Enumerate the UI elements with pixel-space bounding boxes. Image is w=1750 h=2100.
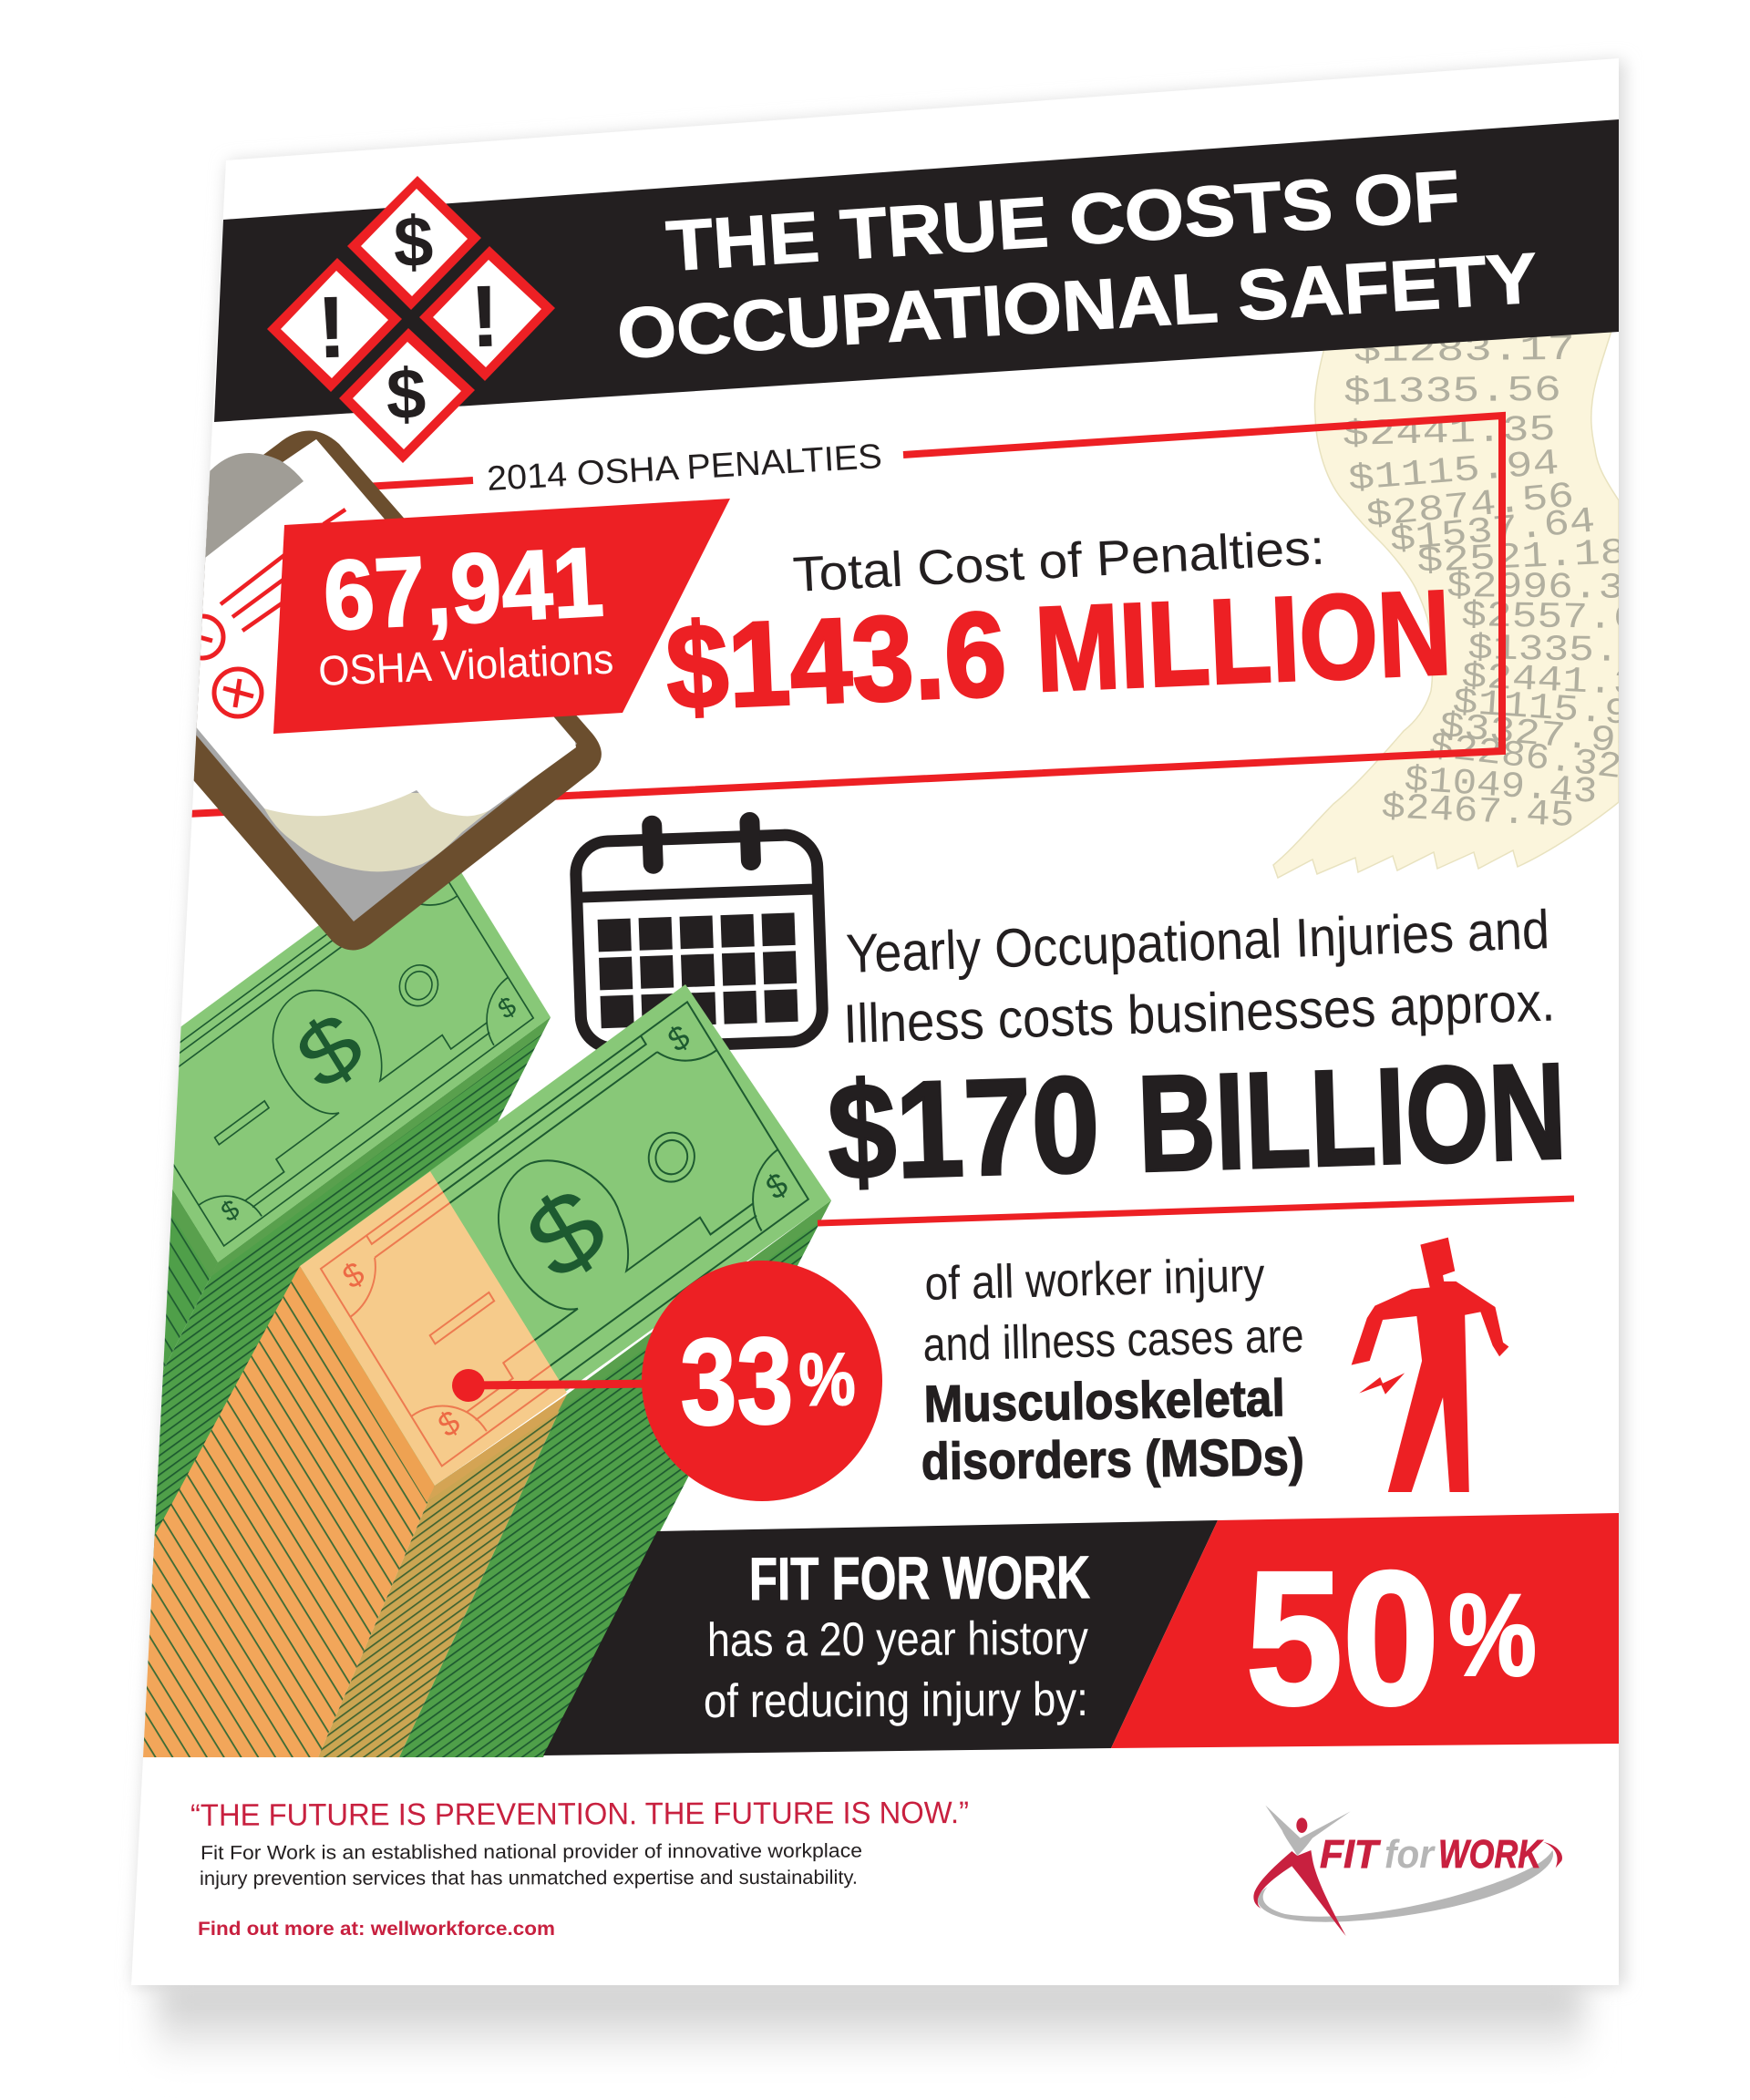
diamond: left exclamation xyxy=(267,258,402,392)
MSD callout: pointer and circle: 33 xyxy=(679,1312,794,1451)
clipboard xyxy=(193,430,602,950)
red rule xyxy=(818,1199,1574,1223)
diamond: bottom dollar: $ xyxy=(386,354,427,434)
plus mark xyxy=(214,669,262,716)
red penalties frame xyxy=(187,416,1502,814)
receipt with printed amounts: $1283.17 xyxy=(1354,330,1575,373)
red violations box xyxy=(273,499,730,734)
back money stack: $ xyxy=(280,992,379,1109)
orange highlighted third of bill: $ xyxy=(432,1402,466,1445)
curled beige sheet xyxy=(264,793,489,871)
yearly cost figure: BILLION xyxy=(1136,1034,1569,1200)
receipt with printed amounts: $1335.56 xyxy=(1343,371,1561,414)
total cost label: Total Cost of Penalties: xyxy=(791,520,1326,602)
footer description xyxy=(200,1839,862,1889)
black history panel: of reducing injury by: xyxy=(704,1673,1088,1728)
title xyxy=(615,155,1539,374)
MSD text: Musculoskeletal xyxy=(923,1369,1285,1434)
back money stack xyxy=(151,873,551,1599)
front money stack: $ xyxy=(507,1162,624,1304)
white sheet xyxy=(197,439,576,817)
diamond: left exclamation: ! xyxy=(315,278,348,377)
red 50 percent panel: 50 xyxy=(1246,1533,1439,1745)
black history panel: FIT FOR WORK xyxy=(749,1543,1090,1612)
footer quote: “THE FUTURE IS PREVENTION. THE FUTURE IS NOW.” xyxy=(190,1796,969,1833)
violations label: OSHA Violations xyxy=(317,634,614,695)
receipt with printed amounts: $3327.96 xyxy=(1437,706,1642,765)
receipt with printed amounts: $2441.35 xyxy=(1342,410,1556,457)
receipt with printed amounts: $2441.35 xyxy=(1460,657,1664,707)
receipt with printed amounts: $2286.32 xyxy=(1427,726,1623,789)
stack side: green right face xyxy=(399,1200,831,1757)
total cost figure: $143.6 xyxy=(664,586,1009,735)
stack side: olive overlap face xyxy=(318,1395,567,1757)
diamond: right exclamation xyxy=(419,246,555,381)
total cost figure: MILLION xyxy=(1033,565,1454,716)
yearly cost figure xyxy=(826,1034,1569,1209)
logo mark xyxy=(1253,1806,1562,1936)
receipt with printed amounts: $1115.94 xyxy=(1451,683,1656,737)
clip xyxy=(205,453,304,558)
receipt with printed amounts xyxy=(1272,332,1619,879)
receipt with printed amounts: $1049.43 xyxy=(1403,760,1599,814)
MSD text: and illness cases are xyxy=(922,1310,1304,1372)
footer link: Find out more at: wellworkforce.com xyxy=(198,1919,555,1940)
receipt with printed amounts: $1115.94 xyxy=(1346,444,1560,501)
stack side: orange left face xyxy=(143,1266,435,1757)
MSD text: of all worker injury xyxy=(924,1249,1265,1311)
receipt with printed amounts: $1537.64 xyxy=(1388,501,1597,562)
title: OCCUPATIONAL SAFETY xyxy=(615,237,1539,374)
receipt with printed amounts: $2521.18 xyxy=(1416,533,1627,583)
front money stack xyxy=(91,984,831,1757)
receipt with printed amounts: $2557.64 xyxy=(1461,596,1664,641)
MSD callout: pointer and circle xyxy=(452,1261,882,1501)
footer description: Fit For Work is an established national provider of innovative workplace xyxy=(201,1839,862,1864)
violations number: 67,941 xyxy=(321,526,606,651)
back money stack: $ xyxy=(493,991,521,1025)
title: THE TRUE COSTS OF xyxy=(664,155,1462,286)
board inner xyxy=(196,439,577,921)
front money stack: $ xyxy=(759,1165,794,1207)
diamond: top dollar: $ xyxy=(393,201,434,282)
MSD text xyxy=(921,1249,1304,1491)
top bill green xyxy=(300,984,831,1486)
MSD callout: pointer and circle: % xyxy=(798,1338,856,1422)
back money stack: $ xyxy=(216,1194,244,1229)
orange highlighted third of bill: $ xyxy=(336,1253,370,1296)
receipt with printed amounts: $2467.45 xyxy=(1380,788,1575,838)
logo wordmark WORK: WORK xyxy=(1438,1832,1544,1877)
diamond: top dollar xyxy=(347,176,481,310)
red 50 percent panel: % xyxy=(1448,1570,1537,1701)
board xyxy=(193,430,602,950)
total cost figure xyxy=(664,565,1454,735)
poster page xyxy=(131,58,1619,1985)
section label: 2014 OSHA PENALTIES xyxy=(486,438,883,499)
icon: injured worker figure xyxy=(1352,1238,1508,1492)
receipt with printed amounts: $2996.37 xyxy=(1446,567,1649,610)
black history panel xyxy=(543,1520,1218,1755)
yearly cost text: Illness costs businesses approx. xyxy=(842,971,1556,1055)
red 50 percent panel xyxy=(1111,1513,1619,1748)
logo xyxy=(1253,1806,1562,1936)
black history panel: has a 20 year history xyxy=(707,1612,1088,1667)
stack edge bands xyxy=(292,1200,831,1502)
yearly cost figure: $170 xyxy=(826,1047,1102,1209)
hazard diamonds icon xyxy=(267,176,555,463)
orange highlighted third of bill xyxy=(300,1171,567,1486)
yearly cost text: Yearly Occupational Injuries and xyxy=(845,899,1550,984)
checklist lines xyxy=(221,510,345,631)
calendar icon xyxy=(573,809,824,1049)
receipt with printed amounts: $2874.56 xyxy=(1364,477,1576,538)
MSD text: disorders (MSDs) xyxy=(921,1428,1304,1491)
diamond: bottom dollar xyxy=(339,328,475,463)
receipt with printed amounts: $1335.56 xyxy=(1467,629,1671,674)
diamond: right exclamation: ! xyxy=(468,267,501,366)
yearly cost text xyxy=(842,899,1556,1055)
logo wordmark FIT: FIT xyxy=(1320,1832,1381,1877)
header band xyxy=(214,119,1619,422)
footer description: injury prevention services that has unmatched expertise and sustainability. xyxy=(200,1867,858,1889)
minus mark xyxy=(201,614,226,660)
front money stack: $ xyxy=(662,1017,695,1059)
logo wordmark for: for xyxy=(1385,1832,1436,1877)
